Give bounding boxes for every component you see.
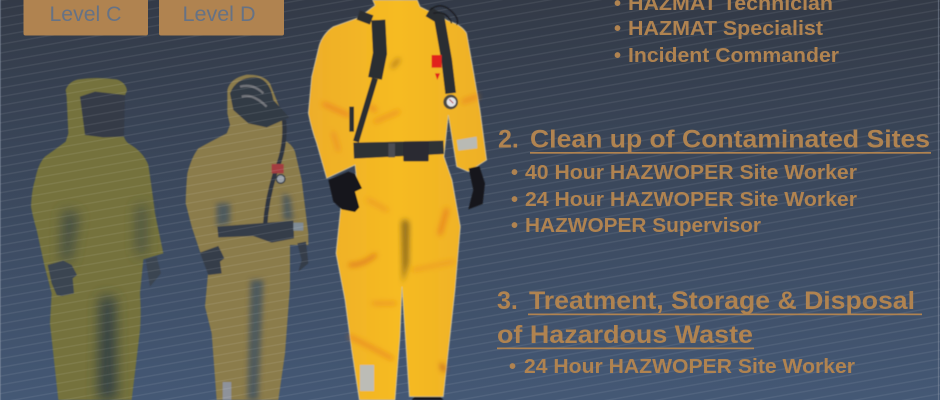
section 2 list bbox=[511, 162, 857, 237]
right glove bbox=[468, 166, 485, 209]
sleeve label bbox=[457, 137, 477, 151]
section 3 heading: Treatment, Storage & Disposal bbox=[529, 287, 915, 315]
button: Level C: Level C bbox=[50, 3, 122, 26]
level C suit figure bbox=[31, 78, 163, 400]
section 2 list: • bbox=[511, 162, 518, 184]
section 2 list: HAZWOPER Supervisor bbox=[525, 215, 761, 237]
chest hazard badge bbox=[432, 55, 442, 80]
section 2 list: • bbox=[511, 189, 518, 211]
air hose bbox=[430, 6, 457, 25]
section 1 list: • bbox=[614, 45, 621, 67]
section 3 list: 24 Hour HAZWOPER Site Worker bbox=[524, 356, 855, 378]
harness left strap bbox=[352, 15, 380, 142]
section 3 heading bbox=[497, 287, 922, 349]
section 3 list: • bbox=[509, 356, 516, 378]
section 2 list: 24 Hour HAZWOPER Site Worker bbox=[525, 189, 857, 211]
section 1 list: Incident Commander bbox=[628, 45, 839, 67]
section 1 list bbox=[614, 0, 839, 67]
level D suit figure bbox=[186, 75, 308, 400]
left glove bbox=[328, 172, 362, 212]
section 3 heading: 3. bbox=[497, 287, 518, 315]
section 2 list: 40 Hour HAZWOPER Site Worker bbox=[525, 162, 857, 184]
button: Level D bbox=[159, 0, 284, 36]
button: Level C bbox=[24, 0, 148, 36]
section 2 list: • bbox=[511, 215, 518, 237]
section 2 heading: Clean up of Contaminated Sites bbox=[530, 126, 930, 154]
gauge bbox=[443, 95, 458, 109]
leg label bbox=[360, 365, 374, 391]
waist belt bbox=[353, 141, 444, 161]
harness right strap bbox=[428, 12, 451, 93]
section 3 heading: of Hazardous Waste bbox=[497, 321, 753, 349]
section 2 heading: 2. bbox=[498, 126, 519, 154]
button: Level D: Level D bbox=[182, 3, 256, 26]
main hazmat suit figure bbox=[308, 0, 487, 400]
section 1 list: HAZMAT Specialist bbox=[628, 18, 823, 40]
section 1 list: • bbox=[614, 18, 621, 40]
